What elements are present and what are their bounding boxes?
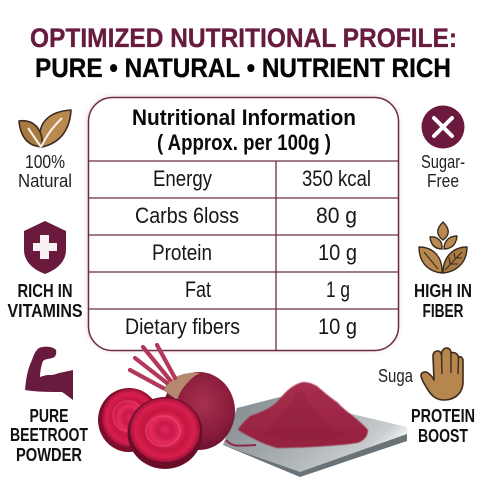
whole beet: [130, 345, 256, 450]
label: pure beetroot powder: [10, 406, 88, 465]
label: 100% natural: 100%: [25, 152, 65, 172]
icon: natural leaves: [19, 110, 71, 147]
table heading: [132, 105, 356, 155]
label: protein boost: [411, 406, 475, 446]
table rows: Energy: [153, 166, 212, 191]
panel: nutritional information table: [88, 97, 398, 350]
label: sugar-free: Sugar-: [421, 152, 465, 172]
label: pure beetroot powder: PURE: [30, 406, 68, 426]
table rows: Fat: [185, 277, 211, 302]
icon: flexed muscle arm: [25, 347, 73, 400]
table rows: 10 g: [318, 314, 357, 339]
icon: vitamins shield: [24, 221, 66, 274]
label: sugar-free: Free: [427, 171, 459, 191]
table rows: Dietary fibers: [125, 314, 240, 339]
icon: protein hand: [421, 348, 463, 400]
table heading: Nutritional Information: [132, 105, 356, 130]
table rows: 10 g: [318, 240, 357, 265]
label: high in fiber: HIGH IN: [414, 281, 472, 301]
beet slice back: [98, 388, 160, 452]
powder pile: [238, 382, 368, 448]
label: high in fiber: FIBER: [422, 301, 464, 321]
label: rich in vitamins: VITAMINS: [8, 301, 82, 321]
title: [30, 23, 457, 83]
label: sugar-free: [421, 152, 465, 191]
label: 100% natural: Natural: [18, 171, 72, 191]
table rows: 350 kcal: [302, 166, 371, 191]
label: rich in vitamins: [8, 281, 82, 321]
label: truncated suga: Suga: [378, 366, 414, 386]
beet slice front: [128, 397, 202, 469]
table rows: 1 g: [326, 277, 350, 302]
icon: sugar free cross: [422, 106, 464, 148]
label: high in fiber: [414, 281, 472, 321]
table rows: Carbs 6loss: [135, 203, 239, 228]
label: pure beetroot powder: POWDER: [16, 445, 82, 465]
slate board: [223, 397, 407, 477]
table rows: [125, 166, 371, 339]
label: 100% natural: [18, 152, 72, 191]
illustration: beetroot and powder: [98, 345, 407, 477]
table rows: Protein: [152, 240, 212, 265]
label: pure beetroot powder: BEETROOT: [10, 425, 88, 445]
icon: fiber plant: [419, 222, 467, 273]
table rows: 80 g: [316, 203, 357, 228]
table heading: ( Approx. per 100g ): [157, 130, 331, 155]
label: rich in vitamins: RICH IN: [18, 281, 72, 301]
